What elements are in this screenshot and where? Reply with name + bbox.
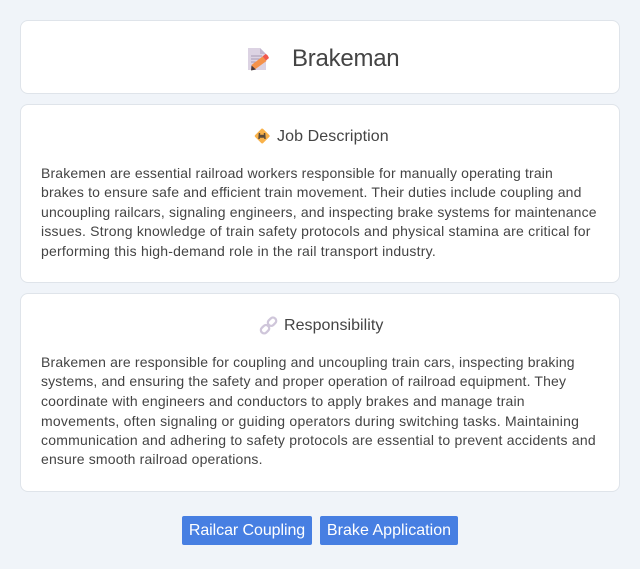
text: responsibility body: coordinate with engineers and conductors to apply brakes and manage train xyxy=(41,393,525,409)
text: responsibility body: movements, often signaling or guiding operators during switching tasks. Maintaining xyxy=(41,413,579,429)
text: responsibility body: Brakemen are responsible for coupling and uncoupling train cars, inspecting braking xyxy=(41,354,575,370)
icon: memo with pencil xyxy=(248,48,269,70)
text: responsibility body xyxy=(41,354,596,467)
heading: Brakeman: Brakeman xyxy=(292,45,399,72)
panel: title xyxy=(20,20,620,94)
text: job description body: brakes to ensure safe and efficient train movement. Their duties include coupling and xyxy=(41,184,582,200)
icon: railway diamond sign xyxy=(254,128,270,144)
text: job description body: Brakemen are essential railroad workers responsible for manually operating train xyxy=(41,165,553,181)
text: responsibility body: systems, and ensuring the safety and proper operation of railroad equipment. They xyxy=(41,373,566,389)
text: job description body: performing this high-demand role in the rail transport industry. xyxy=(41,243,436,259)
heading: Responsibility: Responsibility xyxy=(284,317,383,334)
text: responsibility body: communication and adhering to safety protocols are essential to prevent accidents and xyxy=(41,432,596,448)
panel: job description xyxy=(20,104,620,283)
tag: Railcar Coupling xyxy=(182,516,312,545)
heading: Job Description: Job Description xyxy=(277,128,389,145)
panel: responsibility xyxy=(20,293,620,492)
text: job description body: uncoupling railcars, signaling engineers, and inspecting brake systems for maintenance xyxy=(41,204,597,220)
tag: Brake Application xyxy=(320,516,458,545)
tag: Brake Application: Brake Application xyxy=(327,522,451,539)
text: responsibility body: ensure smooth railroad operations. xyxy=(41,451,263,467)
icon: chain link xyxy=(260,316,278,334)
text: job description body: issues. Strong knowledge of train safety protocols and physical stamina are critical for xyxy=(41,223,591,239)
text: job description body xyxy=(41,165,597,259)
tag: Railcar Coupling: Railcar Coupling xyxy=(189,522,305,539)
